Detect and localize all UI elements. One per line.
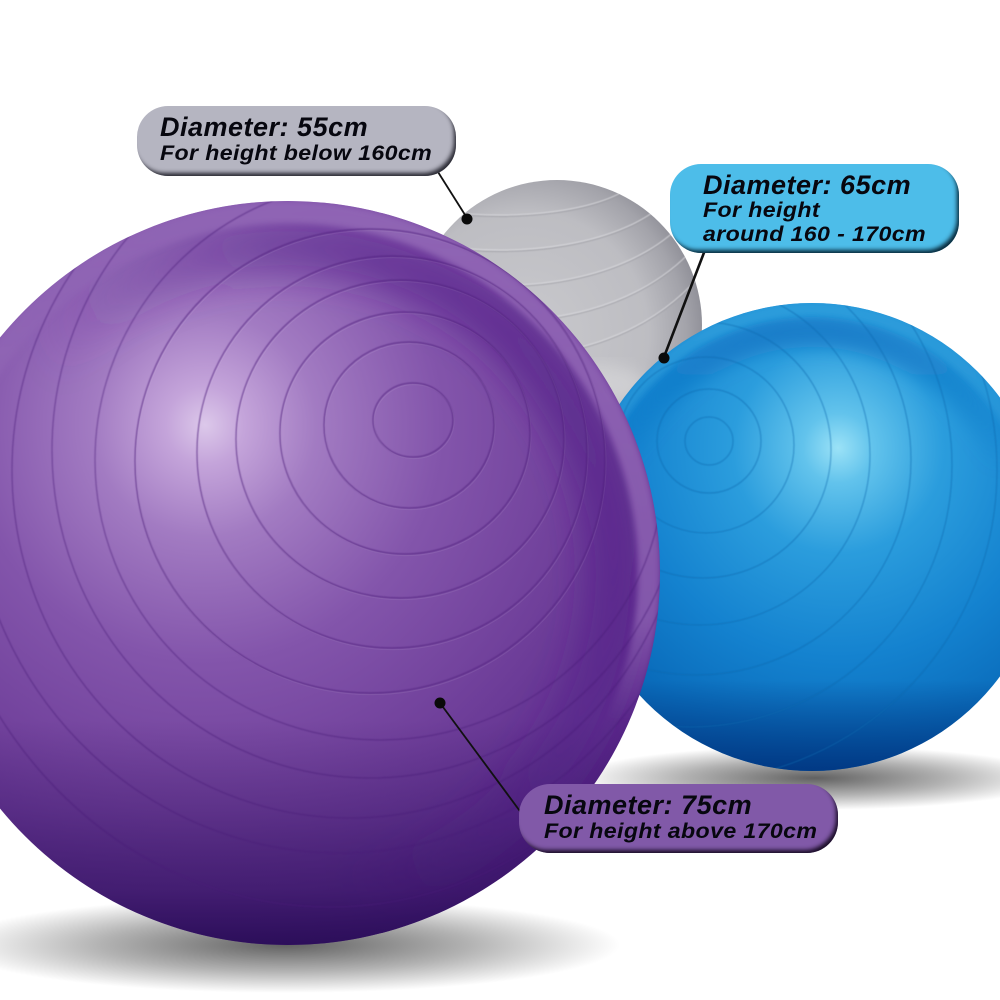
callout: blue 65cm [670, 164, 959, 253]
callout text: height 160-170cm: For height [703, 198, 820, 222]
callout text: height 160-170cm: around 160 - 170cm [703, 222, 926, 246]
connector: blue ball [658, 250, 705, 364]
callout: grey 55cm [137, 106, 456, 176]
shadow: blue ball [575, 746, 1000, 810]
callout heading: diameter 65cm: Diameter: 65cm [703, 170, 911, 200]
callout heading: diameter 75cm: Diameter: 75cm [544, 790, 752, 820]
ball: purple 75cm [0, 201, 660, 945]
callout heading: diameter 55cm: Diameter: 55cm [160, 112, 368, 142]
callout text: height below 160cm: For height below 160cm [160, 141, 432, 165]
connector: purple ball [434, 698, 528, 822]
ball: blue 65cm [620, 303, 1000, 771]
callout text: height 160-170cm [703, 198, 926, 246]
connector: grey ball [438, 172, 472, 224]
ball: grey 55cm [444, 180, 702, 404]
callout text: height above 170cm: For height above 170cm [544, 819, 817, 843]
shadow: purple ball [0, 897, 620, 993]
callout: purple 75cm [519, 784, 838, 853]
